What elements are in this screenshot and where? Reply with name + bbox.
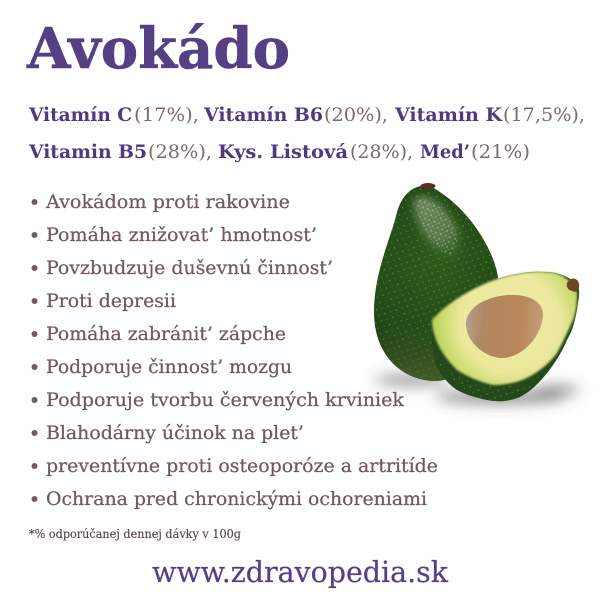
- bullet item 2: Pomáha znižovat’ hmotnost’: [46, 224, 317, 246]
- nutrient: copper: [420, 141, 530, 163]
- half stem: [567, 279, 579, 292]
- bullet item 8: Blahodárny účinok na plet’: [46, 422, 304, 444]
- flesh: [432, 272, 577, 385]
- cut avocado half: [432, 272, 579, 401]
- nutrient: vitamin C: Vitamín C: [28, 104, 132, 126]
- skin: [432, 272, 579, 401]
- nutrient: vitamin B5: (28%),: [148, 142, 212, 163]
- nutrient: vitamin B6: (20%),: [324, 105, 388, 126]
- bullet item 4: Proti depresii: [46, 290, 176, 312]
- nutrient: vitamin C: [28, 104, 199, 126]
- ground shadow: [374, 374, 580, 404]
- bullet item 9: preventívne proti osteoporóze a artritíde: [46, 455, 438, 477]
- bullet item 3: Povzbudzuje duševnú činnost’: [46, 257, 333, 279]
- nutrient: vitamin B6: [203, 104, 388, 126]
- nutrient: folic acid: [218, 141, 413, 163]
- stem: [420, 183, 436, 189]
- nutrient: vitamin B5: Vitamin B5: [28, 141, 147, 163]
- footnote: *% odporúčanej dennej dávky v 100g: [29, 527, 241, 541]
- nutrient: vitamin B5: [28, 141, 212, 163]
- bullet item 7: Podporuje tvorbu červených krviniek: [46, 389, 404, 411]
- bullet item 6: Podporuje činnost’ mozgu: [46, 356, 292, 378]
- nutrient: folic acid: (28%),: [350, 142, 413, 163]
- seed: [466, 295, 543, 358]
- bullet item 5: Pomáha zabránit’ zápche: [46, 323, 286, 345]
- website url: www.zdravopedia.sk: [152, 555, 448, 589]
- bullet item 10: Ochrana pred chronickými ochoreniami: [46, 488, 427, 510]
- whole avocado: [370, 180, 502, 385]
- nutrient: copper: (21%): [471, 142, 530, 163]
- nutrient: vitamin K: [394, 104, 585, 126]
- nutrient: vitamin K: (17,5%),: [503, 105, 585, 126]
- benefits list: [32, 191, 438, 510]
- nutrient list: [28, 104, 585, 163]
- nutrient: vitamin K: Vitamín K: [394, 104, 503, 126]
- nutrient: vitamin C: (17%),: [134, 105, 199, 126]
- title: Avokádo: [26, 16, 290, 82]
- nutrient: vitamin B6: Vitamín B6: [203, 104, 323, 126]
- nutrient: copper: Med’: [420, 141, 470, 163]
- bullet item 1: Avokádom proti rakovine: [45, 191, 290, 213]
- nutrient: folic acid: Kys. Listová: [218, 141, 348, 163]
- avocado illustration: [370, 180, 580, 404]
